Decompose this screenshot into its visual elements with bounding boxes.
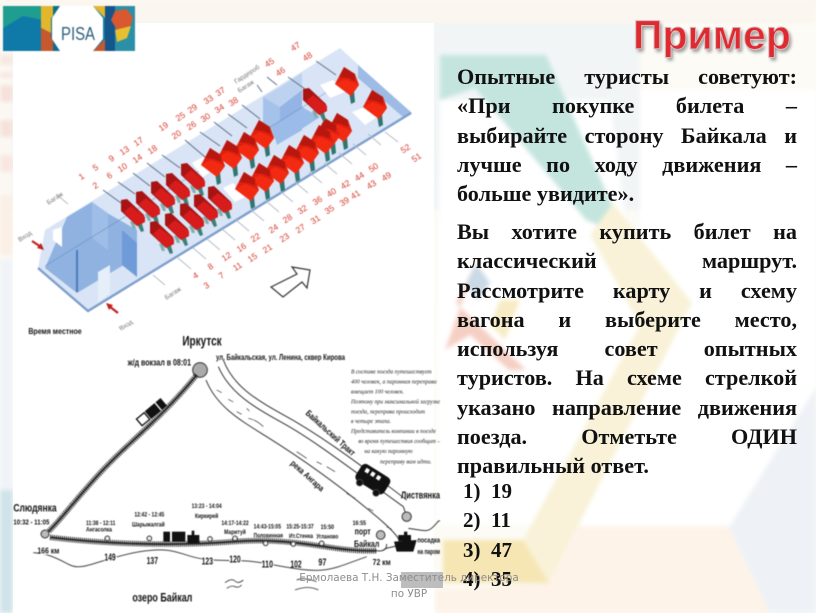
- answer options: 3) 47: [463, 538, 512, 562]
- seat numbers: lower rows: 23: [278, 231, 291, 244]
- text block: task: классический маршрут.: [457, 248, 797, 273]
- seat numbers: window row: 17: [132, 135, 145, 148]
- station labels: Ангасолка: [86, 527, 112, 534]
- shoreline with distances: 149: [104, 553, 116, 564]
- seats: [121, 67, 387, 254]
- text block: note on the map: поезда, переправа происходит: [351, 409, 426, 416]
- icon: train on slope: [136, 398, 167, 426]
- text block: note on the map: вмещает 100 человек.: [351, 390, 404, 396]
- text block: note on the map: на какую паромную: [364, 449, 413, 455]
- text block: task: указано направление движения: [457, 395, 797, 420]
- station labels: [13, 490, 441, 556]
- station labels: 14:17-14:22: [221, 520, 249, 527]
- panel: white picture background: [13, 23, 434, 613]
- answer options: 1) 19: [463, 479, 512, 503]
- icon: entrance arrows: [32, 241, 118, 313]
- road: Baikal tract: река Ангара: [289, 458, 326, 493]
- seat numbers: lower rows: 50: [367, 161, 380, 174]
- shoreline with distances: 72 км: [373, 557, 391, 567]
- logo: PISA: [2, 5, 136, 52]
- seat numbers: lower rows: 24: [267, 222, 280, 235]
- road: Baikal tract: ул. Байкальская, ул. Ленина, сквер Кирова: [216, 352, 345, 362]
- text block: task: используя совет опытных: [457, 336, 797, 361]
- wagon captions: [17, 63, 261, 333]
- wagon captions: Багаж: [237, 79, 256, 95]
- seat numbers: window row: 13: [118, 144, 131, 157]
- station labels: 10:32 - 11:05: [13, 518, 50, 527]
- seat numbers: lower rows: 31: [309, 213, 322, 226]
- wagon captions: Вход: [17, 230, 33, 244]
- text block: note on the map: в четыре этапа.: [351, 419, 391, 425]
- icon: ferry: [394, 521, 440, 552]
- wagon captions: Багаж: [164, 286, 183, 302]
- shoreline with distances: 102: [290, 559, 302, 570]
- station labels: 14:43-15:05: [254, 523, 281, 530]
- text block: tourists' advice: выбирайте сторону Байкала и: [457, 123, 797, 148]
- arrow: direction of travel: [271, 267, 310, 297]
- wagon captions: Гардероб: [233, 63, 261, 85]
- seat numbers: window row: 48: [301, 50, 314, 63]
- text block: task: туристов. На схеме стрелкой: [457, 365, 797, 390]
- text block: task: Рассмотрите карту и схему: [457, 278, 797, 303]
- seat numbers: lower rows: 12: [220, 250, 233, 263]
- seat numbers: window row: 37: [214, 85, 227, 98]
- answer options: 4) 35: [463, 567, 512, 591]
- text block: task: правильный ответ.: [457, 453, 649, 478]
- text block: task: Вы хотите купить билет на: [457, 219, 797, 244]
- station labels: Половинная: [254, 532, 283, 539]
- station labels: Киркирей: [195, 512, 218, 520]
- answer options: 2) 11: [463, 508, 511, 532]
- seat numbers: window row: 19: [157, 120, 170, 133]
- text block: tourists' advice: лучше по ходу движения –: [457, 152, 797, 177]
- seat numbers: window row: 34: [213, 102, 226, 115]
- seat numbers: window row: 5: [91, 162, 100, 173]
- text block: task: вагона и выберите место,: [457, 307, 797, 332]
- text block: tourists' advice: больше увидите».: [457, 181, 634, 206]
- shoreline with distances: [33, 546, 391, 590]
- footer: author: по УВР: [391, 588, 427, 600]
- footer: author: [299, 572, 519, 600]
- seat numbers: window row: 14: [131, 152, 144, 165]
- city: Irkutsk: Иркутск: [182, 332, 222, 348]
- seat numbers: lower rows: 43: [365, 178, 378, 191]
- text block: tourists' advice: [457, 64, 798, 206]
- station labels: 11:38 - 12:11: [86, 520, 116, 527]
- text block: tourists' advice: «При покупке билета –: [457, 93, 797, 118]
- stations: [41, 512, 411, 546]
- station labels: Байкал: [354, 539, 379, 549]
- seat numbers: window row: 6: [105, 170, 114, 181]
- seat numbers: window row: 38: [227, 95, 240, 108]
- text block: task: [457, 219, 797, 478]
- station labels: Маритуй: [224, 528, 246, 536]
- seat numbers: lower rows: 7: [217, 270, 226, 281]
- seat numbers: window row: 46: [274, 65, 287, 78]
- seat numbers: lower rows: 3: [202, 280, 211, 291]
- icon: van: [352, 462, 392, 499]
- station labels: Угланово: [316, 533, 338, 540]
- text block: note on the map: 400 человек, а паромная переправа: [351, 379, 437, 386]
- text block: note on the map: Представитель компании в поезде: [350, 428, 436, 435]
- text block: note on the map: В составе поезда путешествует: [351, 369, 432, 376]
- shoreline with distances: 166 км: [37, 546, 59, 556]
- seat numbers: window row: 10: [116, 161, 129, 174]
- label: Lake Baikal: озеро Байкал: [132, 591, 192, 605]
- shoreline with distances: 110: [262, 559, 273, 570]
- text block: tourists' advice: Опытные туристы советуют:: [457, 64, 797, 89]
- seat numbers: lower rows: 49: [380, 170, 393, 183]
- seat numbers: lower rows: 51: [410, 151, 423, 164]
- seat numbers: lower rows: 21: [261, 242, 274, 255]
- seat numbers: lower rows: 42: [339, 178, 352, 191]
- seat numbers: window row: [77, 40, 314, 191]
- seat numbers: lower rows: 4: [191, 270, 200, 281]
- seat numbers: lower rows: 35: [323, 203, 336, 216]
- shoreline with distances: 123: [202, 557, 213, 568]
- seat numbers: lower rows: 40: [325, 186, 338, 199]
- station labels: 12:42 - 12:45: [134, 511, 165, 518]
- footer: author: Ермолаева Т.Н. Заместитель директора: [299, 572, 519, 584]
- seat numbers: lower rows: 36: [311, 194, 324, 207]
- seat numbers: lower rows: 11: [231, 260, 244, 273]
- road: Baikal tract: Байкальский Тракт: [304, 408, 358, 458]
- wagon captions: Багаж: [46, 191, 65, 207]
- road: Baikal tract: [206, 352, 407, 550]
- shoreline with distances: 120: [229, 554, 241, 565]
- footer backdrop: [401, 572, 443, 588]
- seat numbers: window row: 29: [186, 102, 199, 115]
- logo wordmark: PISA: [61, 24, 95, 44]
- seat numbers: window row: 25: [174, 110, 187, 123]
- station labels: Шарыжалгай: [132, 520, 165, 528]
- seat numbers: lower rows: 16: [235, 241, 248, 254]
- seat numbers: lower rows: 8: [206, 261, 215, 272]
- wagon seating scheme: [17, 40, 423, 330]
- shoreline with distances: 137: [147, 556, 158, 567]
- seat numbers: window row: 45: [263, 56, 276, 69]
- city: Irkutsk: ж/д вокзал в 08:01: [127, 357, 191, 367]
- text block: note on the map: [350, 369, 441, 466]
- map heading: Время местное: [28, 326, 82, 336]
- icon: train on shore: [163, 531, 199, 543]
- shoreline with distances: 97: [318, 558, 326, 569]
- station labels: 15:25-15:37: [286, 523, 314, 530]
- city: Irkutsk: [127, 332, 222, 377]
- seat numbers: lower rows: 27: [294, 222, 307, 235]
- seat numbers: window row: 1: [77, 171, 86, 182]
- station labels: порт: [355, 526, 371, 536]
- seat numbers: window row: 33: [202, 93, 215, 106]
- title: Пример: [633, 12, 791, 58]
- railway: [48, 375, 387, 551]
- seat numbers: window row: 9: [107, 153, 116, 164]
- station labels: 15:50: [321, 524, 334, 531]
- seat numbers: window row: 26: [185, 119, 198, 132]
- seat numbers: lower rows: 15: [246, 251, 259, 264]
- seat numbers: lower rows: 32: [296, 203, 309, 216]
- seat numbers: window row: 18: [146, 143, 159, 156]
- leader lines: [56, 61, 398, 285]
- seat numbers: window row: 30: [199, 111, 212, 124]
- seat numbers: lower rows: 39: [338, 195, 351, 208]
- seat numbers: lower rows: [191, 142, 423, 291]
- station labels: Слюдянка: [13, 502, 57, 514]
- station labels: 16:55: [353, 520, 366, 527]
- text block: task: поезда. Отметьте ОДИН: [457, 424, 797, 449]
- station labels: Ит.Стенка: [289, 533, 313, 540]
- seat numbers: lower rows: 28: [281, 212, 294, 225]
- text block: note on the map: переправу вам идти.: [380, 459, 432, 466]
- station labels: 13:23 - 14:04: [192, 503, 222, 510]
- wagon body: [38, 48, 412, 311]
- seat numbers: lower rows: 22: [249, 231, 262, 244]
- seat numbers: window row: 47: [289, 40, 302, 53]
- seat numbers: lower rows: 41: [349, 188, 362, 201]
- seat numbers: window row: 20: [170, 128, 183, 141]
- route map: [13, 326, 441, 605]
- seat numbers: lower rows: 52: [399, 142, 412, 155]
- seat numbers: window row: 2: [91, 180, 100, 191]
- seat numbers: lower rows: 44: [353, 170, 366, 183]
